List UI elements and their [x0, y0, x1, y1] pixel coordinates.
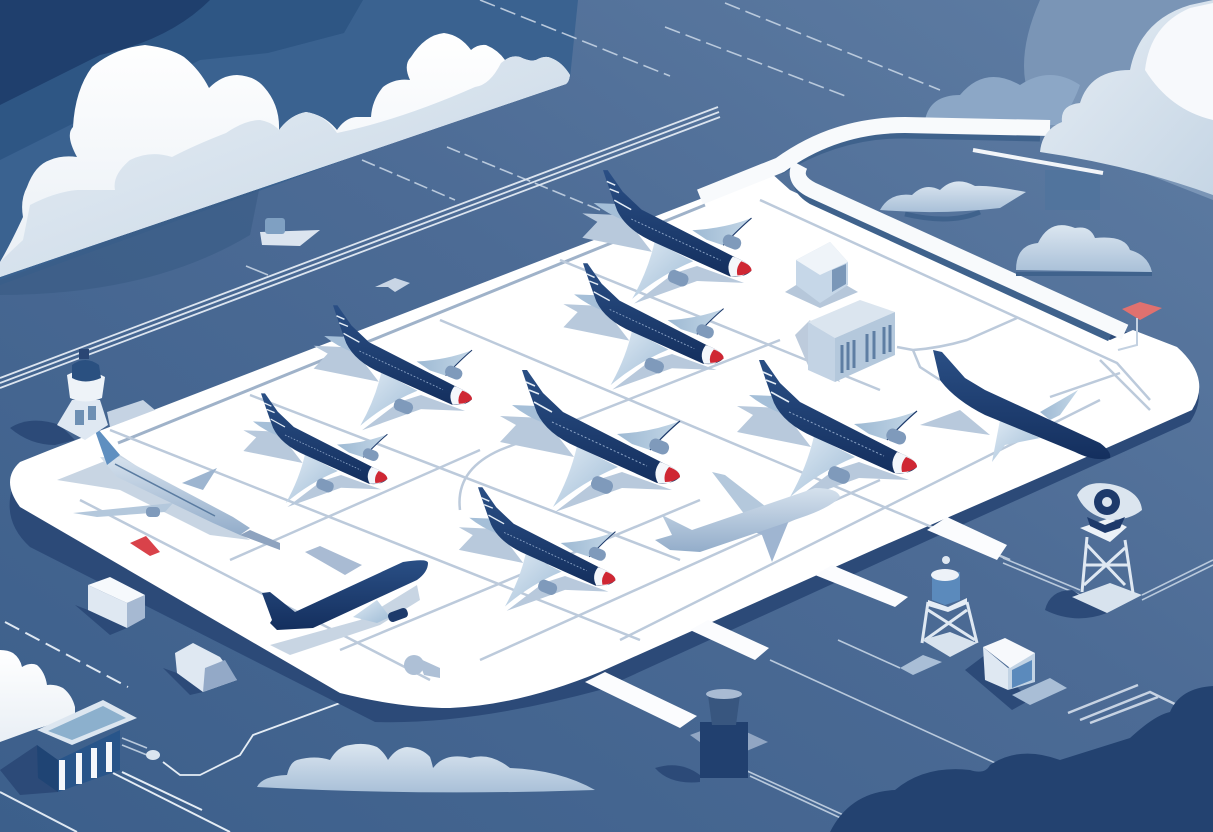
hut: right lower [965, 638, 1067, 710]
building: main terminal [795, 300, 895, 382]
aircraft: light left [57, 422, 280, 550]
service buildings: lower left [75, 577, 145, 635]
building: upper terminal [785, 242, 858, 308]
small cargo items on apron [130, 536, 440, 678]
dark cloud: bottom right [830, 686, 1213, 832]
runway strip: top left diagonal [0, 107, 720, 388]
aircraft: second row right [563, 263, 724, 390]
sky band: top right haze [1024, 0, 1213, 200]
aircraft: far right dark [920, 350, 1110, 462]
aircraft: second row left [314, 305, 472, 430]
cloud: bottom centre [257, 744, 595, 792]
aircraft: lower centre [459, 487, 615, 611]
taxi loop stripe [973, 150, 1103, 173]
taxi band along top of apron [118, 205, 705, 443]
aircraft: top centre [582, 170, 752, 304]
taxiway line network [80, 200, 1150, 680]
service vehicle: top [260, 218, 320, 246]
flag marker [1118, 302, 1162, 350]
small vehicle mark [375, 278, 410, 292]
taxi loop: shadow under band [780, 134, 1110, 337]
control tower: left [10, 349, 155, 445]
white cloud: top left [0, 33, 570, 277]
apron shadow [10, 205, 1199, 722]
apron: main white surface [10, 172, 1199, 708]
service vehicle: lower left [163, 643, 237, 695]
runway chevrons: lower right [1068, 685, 1183, 723]
aircraft: centre [500, 370, 680, 512]
aircraft: left [243, 393, 387, 507]
radar tower: right [1045, 483, 1142, 618]
radar tower: centre [900, 556, 977, 675]
aircraft: right [737, 360, 917, 502]
cloud: centre right small [880, 181, 1026, 219]
white cloud: top right [925, 75, 1100, 210]
cloud: top right foreground [1040, 0, 1213, 195]
cloud: left lower [0, 650, 75, 742]
aircraft: bottom left dark [262, 560, 428, 655]
sky band: top left layered [0, 0, 578, 295]
taxi loop: top right band [700, 125, 1125, 332]
pier stubs on apron edge [585, 517, 1007, 728]
cloud: right small [1016, 225, 1152, 276]
hangar: bottom left [0, 700, 160, 795]
aircraft: light right [655, 472, 840, 562]
control post: bottom [655, 689, 768, 782]
